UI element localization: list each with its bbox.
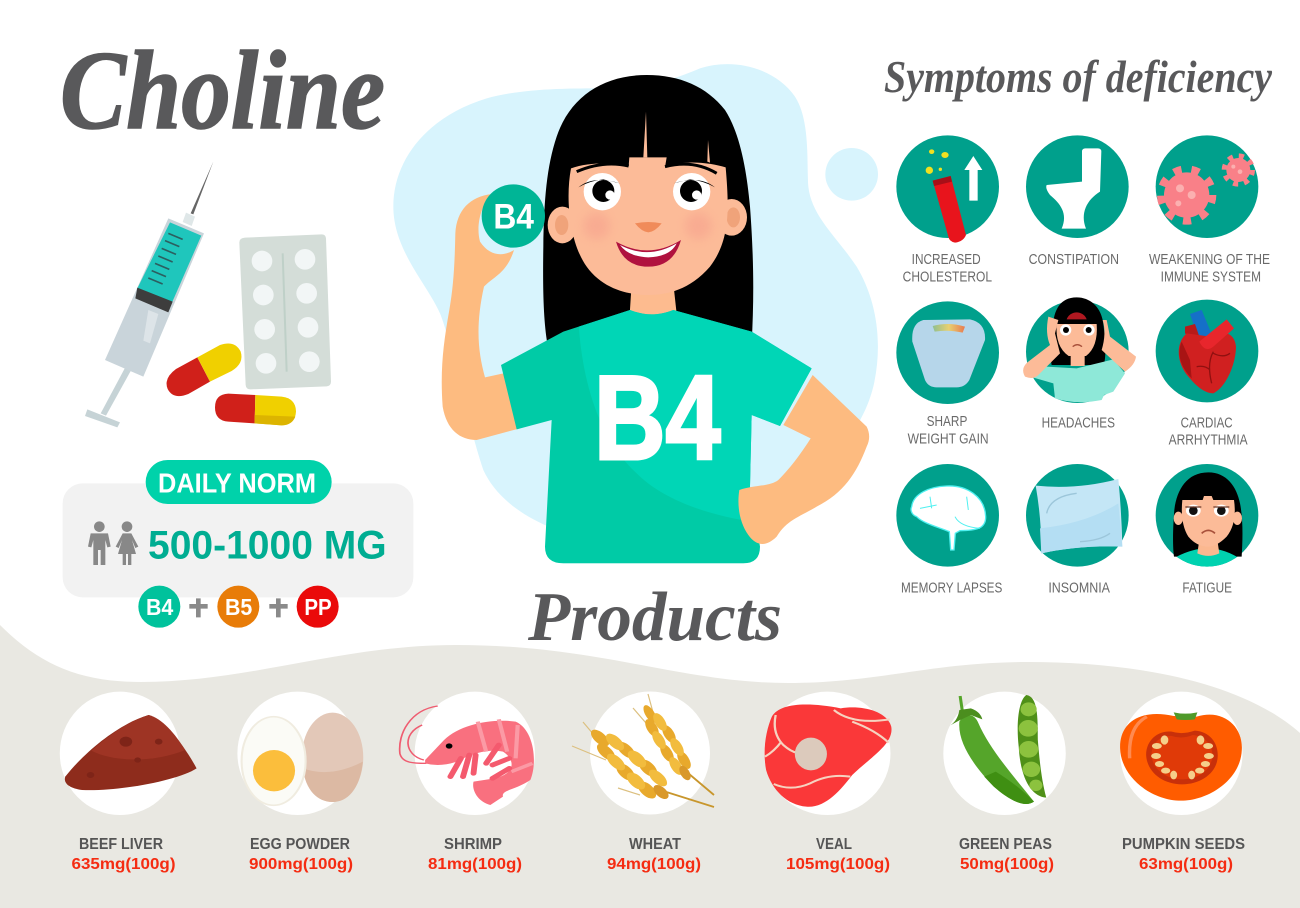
shirt lettering: B4 [594,351,721,485]
title: Choline: Choline [60,29,385,153]
background blob [393,64,878,540]
amount: 900mg(100g) [249,856,353,873]
plate and shrimp [400,692,535,815]
amount: 94mg(100g) [607,856,701,873]
background dot [825,148,878,201]
symptom: weakening of the immune system: IMMUNE SYSTEM [1161,270,1261,286]
panel: medicine and daily norm [63,162,413,628]
hair strands [643,112,710,163]
vitamin combination: PP [304,594,332,620]
food: beef liver [60,692,197,873]
symptom: headaches: HEADACHES [1042,416,1115,432]
symptom: cardiac arrhythmia: ARRHYTHMIA [1169,432,1248,448]
vitamin ball [482,184,545,248]
nose [635,222,662,232]
plate and pods [943,692,1066,815]
plate and pumpkin [1120,692,1243,815]
symptom: increased cholesterol [896,135,999,286]
label: VEAL [816,836,852,853]
label: WHEAT [629,836,681,853]
wheat ear left [588,727,671,802]
icon: capsule tilted [167,343,241,396]
icon: capsule flat [215,394,296,425]
panel: symptoms [896,135,1270,597]
amount: 81mg(100g) [428,856,522,873]
amount: 63mg(100g) [1139,856,1233,873]
amount: 50mg(100g) [960,856,1054,873]
badge: daily norm [146,460,332,504]
mouth [616,240,681,267]
plate and liver [60,692,197,815]
food: egg powder [237,692,363,873]
label: PUMPKIN SEEDS [1122,836,1245,853]
label: BEEF LIVER [79,836,163,853]
ears [548,199,747,243]
illustration: girl with vitamin B4 [393,64,878,577]
heading: products: Products [527,579,782,656]
neck [629,283,677,320]
panel: norm background [63,483,413,597]
background band: products [0,625,1300,908]
symptom: memory lapses [896,464,1003,597]
plate [590,692,710,814]
symptom: fatigue [1156,464,1258,597]
badge: daily norm: DAILY NORM [158,468,316,499]
symptom: fatigue: FATIGUE [1182,581,1232,597]
daily dose value: 500-1000 MG [148,524,387,568]
eyebrows [577,164,717,173]
symptom: constipation [1026,135,1129,268]
symptom: sharp weight gain [896,301,999,447]
vitamin combination: B4 [146,594,173,620]
symptom: constipation: CONSTIPATION [1029,252,1119,268]
symptom: cardiac arrhythmia [1156,300,1258,448]
symptom: headaches [1023,297,1136,432]
vitamin ball: B4 [493,198,534,237]
symptom: increased cholesterol: INCREASED [912,252,981,268]
vitamin combination [138,586,339,628]
food: shrimp [400,692,535,873]
symptom: sharp weight gain: SHARP [927,414,967,430]
left arm [442,194,520,440]
symptom: increased cholesterol: CHOLESTEROL [903,270,992,286]
food: wheat [572,692,714,873]
food: veal [764,692,892,873]
icon: blister pack [239,234,331,389]
cheeks [583,213,712,239]
symptom: insomnia [1026,464,1129,597]
wheat ear right [641,703,694,782]
symptom: insomnia: INSOMNIA [1048,581,1110,597]
face [569,157,728,295]
symptom: memory lapses: MEMORY LAPSES [901,581,1003,597]
amount: 635mg(100g) [72,856,176,873]
symptom: weakening of the immune system: WEAKENING OF THE [1149,252,1270,268]
vitamin combination: B5 [225,594,252,620]
icon: man and woman [88,521,138,565]
symptom: cardiac arrhythmia: CARDIAC [1181,415,1233,431]
food: pumpkin seeds [1120,692,1245,873]
food: green peas [943,692,1066,873]
symptom: sharp weight gain: WEIGHT GAIN [908,431,989,447]
plate and eggs [237,692,363,815]
stems and awns [660,768,714,807]
t-shirt [501,310,812,564]
eyes [578,173,715,210]
label: SHRIMP [444,836,502,853]
plate and meat [764,692,892,815]
symptom: weakening of the immune system [1149,135,1270,286]
hair [543,75,753,343]
label: EGG POWDER [250,836,350,853]
label: GREEN PEAS [959,836,1052,853]
amount: 105mg(100g) [786,856,890,873]
icon: syringe [85,162,213,427]
right arm [738,375,869,544]
